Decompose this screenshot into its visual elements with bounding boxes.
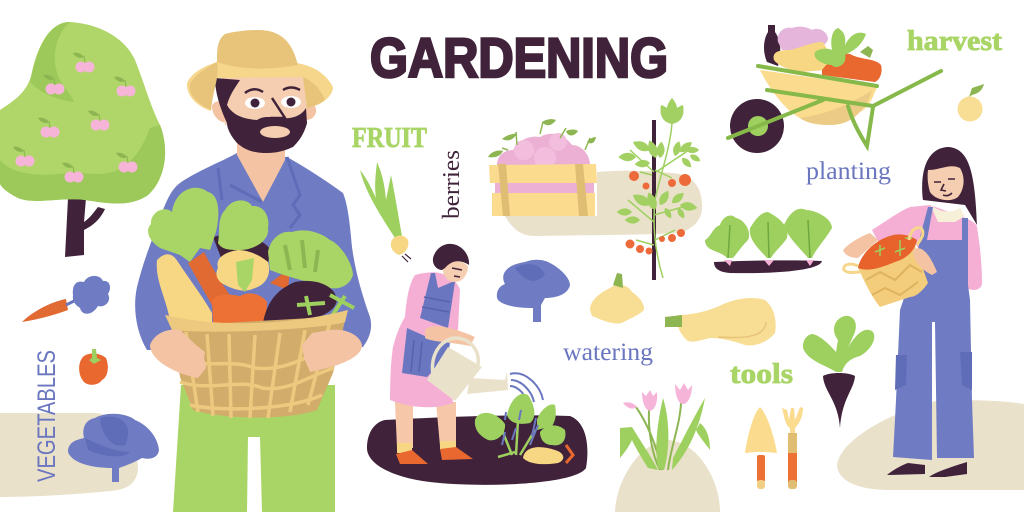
title: GARDENING — [370, 26, 668, 89]
icon: trowel — [745, 407, 777, 489]
label: fruit: FRUIT — [352, 122, 427, 154]
woman: apron stripes — [411, 297, 450, 372]
woman watering — [390, 244, 475, 464]
man: eyes — [245, 88, 301, 118]
label: planting: planting — [806, 158, 892, 185]
woman: sweater — [872, 205, 982, 290]
tulips — [620, 383, 710, 470]
man: neck — [237, 140, 285, 202]
woman: shoes — [396, 447, 473, 464]
man: basket — [165, 310, 348, 418]
woman: dress — [390, 272, 460, 407]
woman: glasses — [452, 268, 462, 277]
woman: head — [443, 260, 468, 282]
woman: hair — [922, 147, 977, 225]
icon: beetroot — [803, 316, 874, 428]
man: ears — [212, 102, 316, 122]
woman: basket — [844, 228, 928, 307]
woman: socks — [397, 441, 456, 453]
label: watering: watering — [563, 339, 654, 366]
icon: blue cabbage — [68, 414, 159, 482]
wheelbarrow — [728, 25, 941, 153]
man: hands — [150, 330, 362, 378]
crate of berries — [488, 119, 597, 216]
label: berries: berries — [439, 150, 465, 219]
soil bed — [367, 415, 587, 485]
icon: blue cabbage small — [497, 260, 570, 322]
seedlings row — [705, 209, 832, 273]
woman: overalls — [893, 207, 974, 460]
tomato plant — [617, 98, 702, 280]
icon: pepper — [79, 349, 108, 385]
icon: yellow squash — [665, 298, 776, 345]
woman: arm — [425, 326, 475, 346]
plant in soil with squash — [475, 394, 573, 464]
icon: pattypan squash — [590, 273, 644, 323]
man with vegetable basket — [135, 30, 371, 512]
label: vegetables: VEGETABLES — [33, 350, 61, 482]
woman: legs — [395, 402, 456, 448]
icon: spring onion — [360, 162, 411, 262]
label: tools: tools — [730, 358, 793, 390]
wheelbarrow: contents — [764, 25, 882, 82]
man: mouth — [260, 126, 290, 138]
woman: eyes and smile — [934, 179, 955, 196]
apple tree — [0, 22, 165, 257]
label: harvest: harvest — [907, 26, 1003, 57]
woman: face — [928, 166, 964, 200]
man: trousers — [173, 385, 335, 512]
man: face — [222, 77, 307, 125]
man: shirt — [135, 153, 371, 350]
basket vegetables — [148, 188, 354, 323]
man: hair and beard — [215, 78, 307, 153]
watering can — [427, 338, 543, 402]
woman: apron — [402, 273, 455, 377]
icon: yellow apple — [958, 84, 984, 122]
woman with tomato basket — [843, 147, 982, 477]
woman: hair — [433, 244, 469, 270]
icon: hand fork — [782, 407, 803, 489]
woman: shoes — [887, 462, 967, 477]
man: collar lines — [218, 157, 300, 228]
man: hat — [187, 30, 333, 111]
icon: carrot — [22, 276, 110, 322]
woman: collar — [930, 204, 965, 222]
woman: pockets — [895, 352, 972, 390]
woman: hands — [843, 233, 937, 275]
